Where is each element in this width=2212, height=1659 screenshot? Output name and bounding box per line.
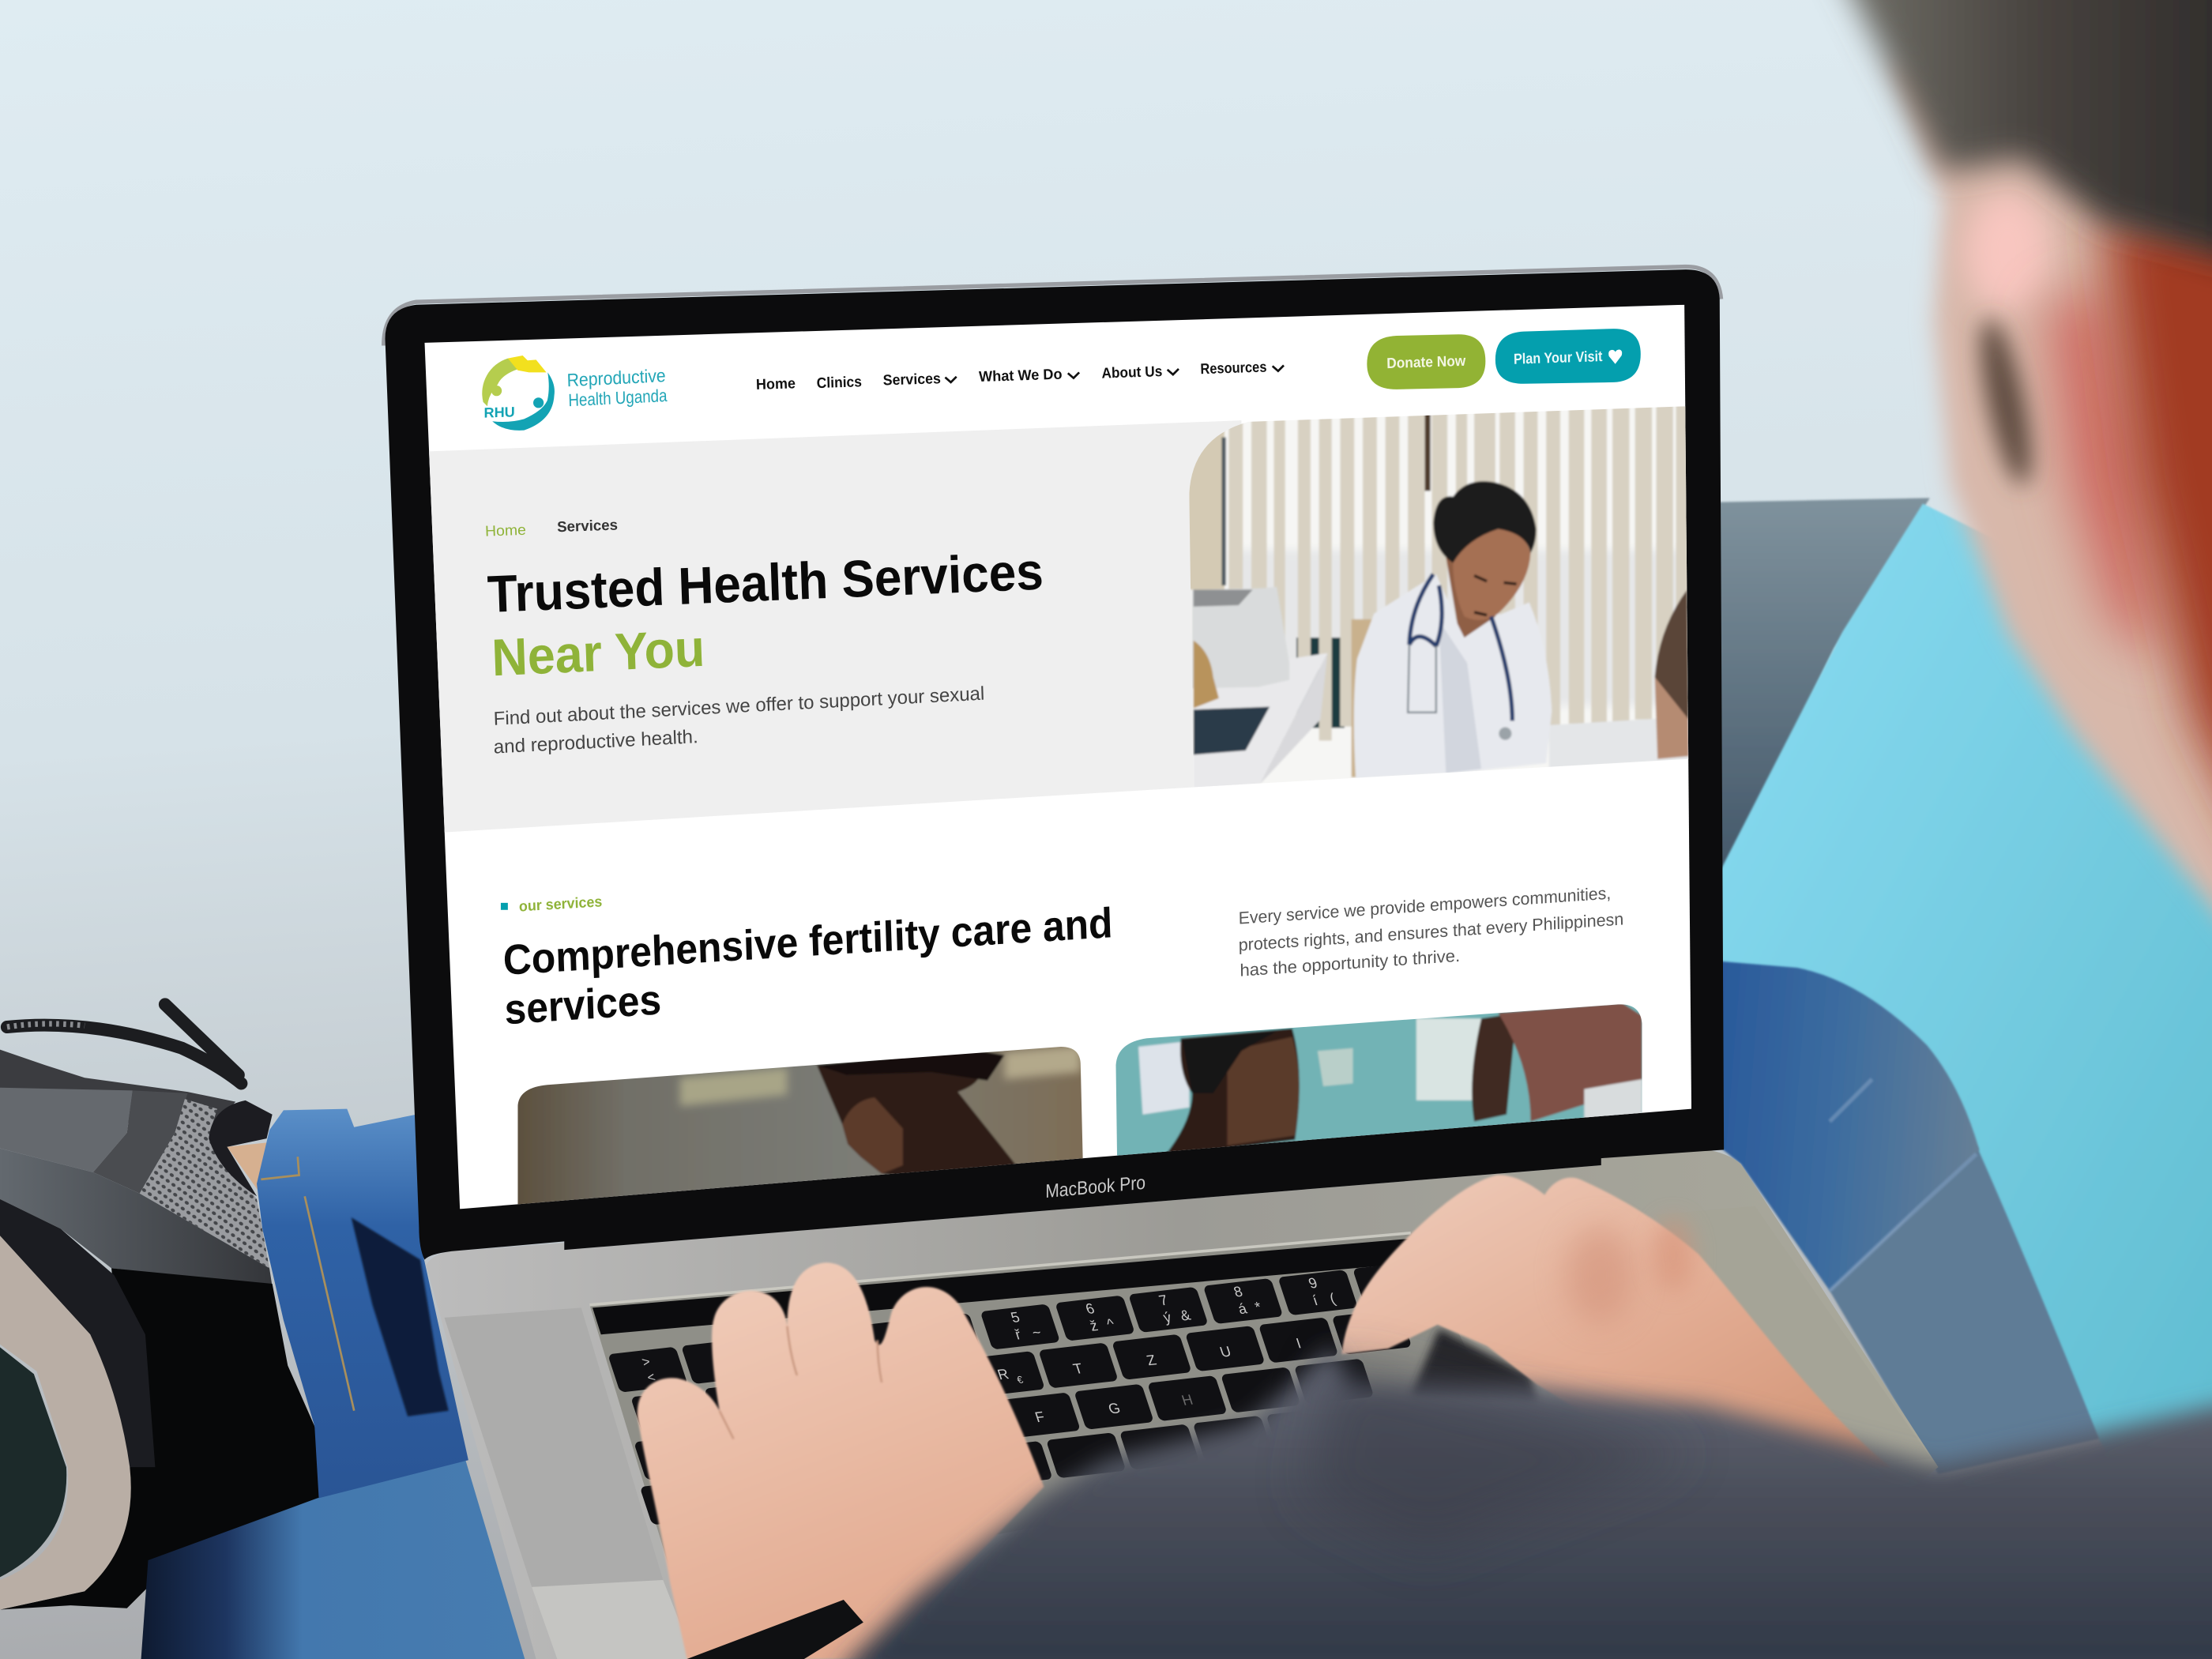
keyboard: keys: ( <box>1327 1290 1338 1307</box>
keyboard: keys: ^ <box>1104 1315 1117 1332</box>
section heading: services <box>504 976 662 1033</box>
navigation: Clinics <box>816 373 862 391</box>
shoe: sock <box>228 1142 267 1191</box>
keyboard: keys: á <box>1236 1300 1250 1317</box>
keyboard shadow under right palm <box>1411 1329 1537 1404</box>
lid: top edge highlight <box>384 267 1721 346</box>
photo: desk <box>1194 653 1327 790</box>
head: ear flush <box>1966 192 2212 903</box>
logo wordmark: Health Uganda <box>568 386 668 410</box>
navigation: Services <box>882 370 941 388</box>
photo: skull model <box>1194 641 1219 708</box>
shoe: cream outsole <box>0 1236 131 1610</box>
breadcrumb: Services <box>557 517 618 535</box>
section heading: Comprehensive fertility care and <box>502 899 1113 984</box>
keyboard: keys: * <box>1253 1298 1263 1315</box>
keyboard: keys: í <box>1311 1292 1320 1308</box>
keyboard: keys: 5 <box>1009 1308 1021 1326</box>
shoe: tread <box>0 1347 66 1577</box>
keyboard: keys: F <box>1033 1409 1047 1425</box>
service card photo: woman <box>508 1036 1093 1234</box>
keyboard: keys <box>596 1261 1476 1525</box>
section heading <box>502 899 1113 1033</box>
shoe: glossy wedge <box>0 1199 155 1467</box>
shoe: mesh panel <box>140 1099 269 1268</box>
logo wordmark: Reproductive <box>566 365 666 390</box>
jeans: left leg <box>141 1109 525 1659</box>
breadcrumb <box>486 520 618 536</box>
photo: left wall <box>1185 423 1224 589</box>
photo: neck <box>1446 557 1503 638</box>
shoe: black main body <box>0 1268 327 1610</box>
photo: white coat <box>1354 574 1552 779</box>
navigation <box>757 363 1285 389</box>
keyboard: keys: & <box>1178 1307 1193 1324</box>
section tag: our services: our services <box>519 893 603 915</box>
hero title: Trusted Health Services <box>487 542 1044 624</box>
keyboard <box>589 1233 1510 1594</box>
foreground sweater <box>833 1349 2212 1659</box>
keyboard: keys: H <box>1179 1391 1195 1409</box>
hero title: Near You <box>491 619 705 687</box>
jeans: stitching <box>261 1157 354 1411</box>
laptop base <box>426 1149 1939 1659</box>
screen: white page <box>416 296 1700 1228</box>
lid: MacBook Pro wordmark: MacBook Pro <box>1045 1172 1146 1202</box>
hero description <box>493 683 985 758</box>
knee: crease highlight <box>1830 1079 1977 1291</box>
section intro text: protects rights, and ensures that every Philippinesn <box>1239 908 1623 955</box>
turquoise cushion <box>1718 504 2212 1467</box>
header logo <box>482 356 555 431</box>
blurred foreground head <box>1826 0 2212 945</box>
keyboard: keys: U <box>1217 1343 1233 1360</box>
photo: windowsill <box>1549 717 1690 769</box>
navigation: Home <box>756 374 796 393</box>
keyboard: touch bar <box>592 1239 1418 1334</box>
jeans: rolled cuff <box>257 1109 468 1498</box>
photo: patient head <box>1655 589 1689 759</box>
sweater: main mass <box>833 1349 2212 1659</box>
service card photo: man and nurse <box>1108 995 1650 1178</box>
keyboard: keys: R <box>995 1365 1010 1382</box>
photo: hair <box>1433 481 1537 562</box>
jeans: right knee <box>1714 961 2099 1474</box>
keyboard: keys: 9 <box>1307 1274 1319 1292</box>
logo: teal crescent <box>492 372 555 431</box>
photo: facial features <box>1474 576 1517 615</box>
button: Donate Now: Donate Now <box>1386 352 1466 371</box>
nav chevrons <box>945 365 1284 382</box>
keyboard: keys: € <box>1015 1374 1025 1386</box>
keyboard: keys: > <box>640 1354 653 1370</box>
keyboard: keys: ý <box>1161 1308 1174 1326</box>
head: ear shadow <box>1970 315 2041 489</box>
photo: window background <box>1185 402 1693 797</box>
icon: heart <box>1608 349 1622 364</box>
shoe <box>0 1004 327 1610</box>
shoe: heel collar <box>209 1100 273 1196</box>
keyboard: keys: G <box>1106 1399 1123 1416</box>
section intro text: has the opportunity to thrive. <box>1240 946 1460 980</box>
knee: grey-blue lower leg <box>1830 1146 2099 1474</box>
base: left speaker grille <box>444 1307 663 1587</box>
laptop lid and bezel <box>384 267 1724 1260</box>
logo: figure heads <box>491 386 544 408</box>
keyboard: keys: I <box>1294 1335 1303 1352</box>
hero description: and reproductive health. <box>493 726 698 758</box>
jeans: inner shadow <box>352 1217 449 1416</box>
photo: vertical blinds <box>1228 402 1690 741</box>
laptop screen: website <box>416 296 1700 1234</box>
keyboard: keys: ř <box>1013 1326 1024 1343</box>
head: skin <box>1890 56 2212 945</box>
logo: yellow leaf <box>508 356 547 372</box>
shoe: carbon panel <box>93 1090 188 1194</box>
left hand <box>638 1262 1044 1659</box>
keyboard: keys: 7 <box>1157 1292 1170 1308</box>
button: Plan Your Visit <box>1495 329 1641 384</box>
base: lower palm rest <box>532 1580 694 1659</box>
photo: face <box>1453 529 1531 620</box>
button: Plan Your Visit: Plan Your Visit <box>1514 348 1603 367</box>
breadcrumb: Home <box>485 521 526 540</box>
keyboard: keys: ~ <box>1029 1324 1044 1341</box>
lid: black bezel <box>386 269 1724 1260</box>
photo: tablet x-ray <box>1194 707 1270 754</box>
photo: window frame <box>1425 413 1431 491</box>
keyboard: keys: Z <box>1145 1352 1158 1368</box>
photo: dark panel <box>1296 638 1345 728</box>
navigation: What We Do <box>979 366 1063 385</box>
shoe: laces <box>7 1004 241 1083</box>
hero title <box>487 555 1041 676</box>
sweater: dark fold <box>1305 1361 1693 1552</box>
keyboard: keys: 8 <box>1232 1283 1245 1300</box>
keyboard: top highlight <box>589 1233 1411 1305</box>
photo: chair <box>1352 619 1373 777</box>
right hand <box>1341 1175 1890 1481</box>
photo: stethoscope <box>1409 574 1512 720</box>
logo wordmark <box>568 369 668 407</box>
button: Donate Now <box>1367 334 1485 389</box>
knee: blue upper fold <box>1714 961 1979 1291</box>
hero description: Find out about the services we offer to support your sexual <box>493 683 985 730</box>
logo: green arc <box>482 359 521 406</box>
base: silver deck <box>426 1149 1939 1659</box>
head: hair <box>1826 0 2212 268</box>
navigation: About Us <box>1101 363 1163 382</box>
jeans: lower leg <box>141 1460 525 1659</box>
grey sofa <box>1714 498 1930 903</box>
keyboard: keys: ž <box>1088 1317 1100 1334</box>
section intro text <box>1239 883 1623 980</box>
keyboard: keys: T <box>1071 1360 1085 1377</box>
hero photo: doctor at desk <box>1185 402 1693 797</box>
shoe: textured panel <box>0 1088 133 1172</box>
shoe: stitched band <box>0 1149 273 1287</box>
keyboard: keys: < <box>645 1370 657 1385</box>
section intro text: Every service we provide empowers communities, <box>1239 883 1611 928</box>
logo: RHU letters: RHU <box>483 404 515 421</box>
photo: printer <box>1192 587 1289 688</box>
navigation: Resources <box>1200 359 1267 377</box>
base: right speaker grille <box>1656 1206 1932 1467</box>
watch band <box>687 1600 863 1659</box>
hero grey panel <box>429 420 1241 833</box>
shoe: top strip <box>0 1050 235 1129</box>
keyboard: well <box>589 1233 1510 1594</box>
keyboard: keys: 6 <box>1083 1300 1097 1317</box>
